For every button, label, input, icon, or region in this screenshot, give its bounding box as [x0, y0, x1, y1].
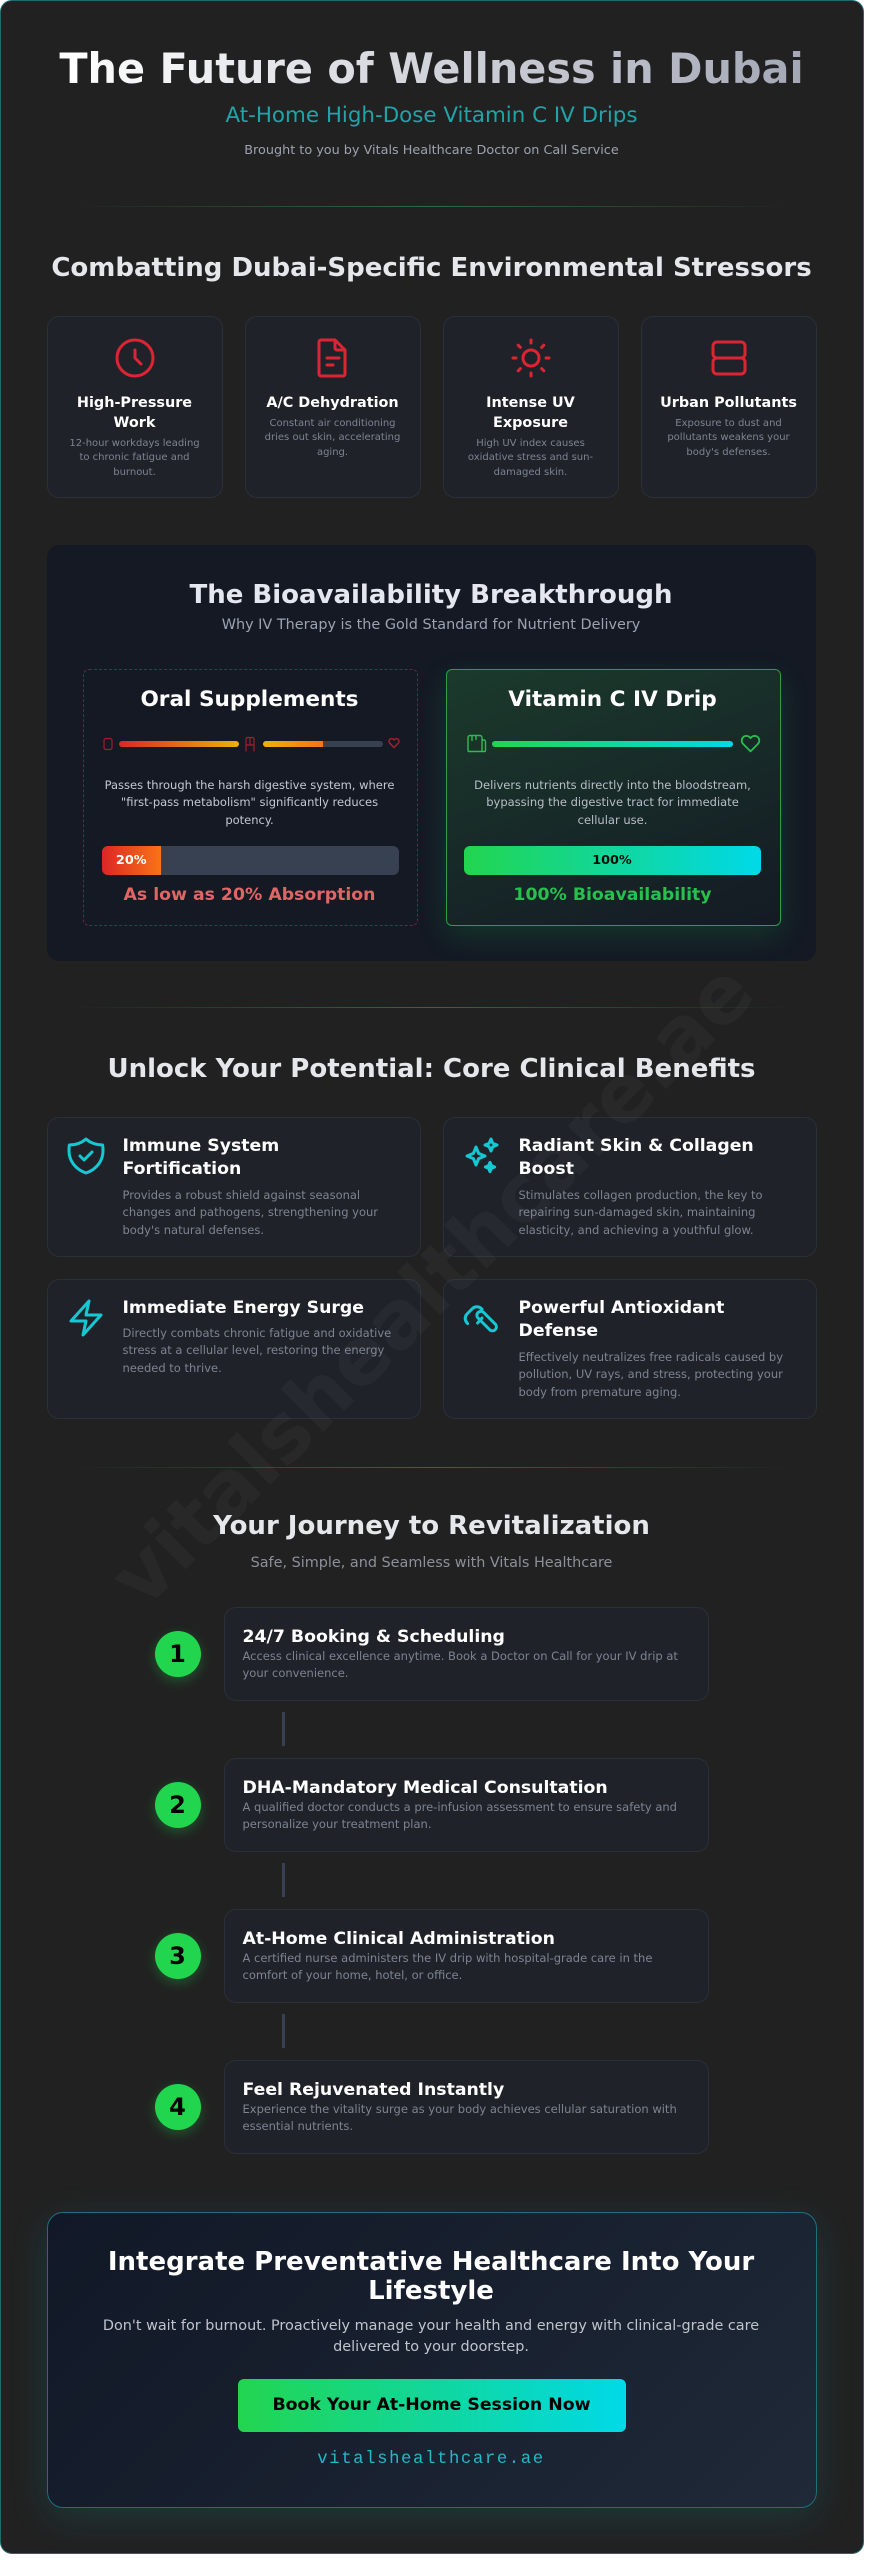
benefit description: elasticity, and achieving a youthful glow.	[518, 1223, 753, 1237]
benefit title: Fortification	[122, 1159, 241, 1179]
step description: your convenience.	[242, 1666, 348, 1680]
CTA button	[238, 2379, 626, 2432]
pathway diagram	[103, 736, 400, 752]
heading: journey: Your Journey to Revitalization	[213, 1511, 650, 1541]
icon: pill	[103, 738, 113, 750]
bar fill: 20%	[102, 846, 161, 875]
benefit title: Immune System	[122, 1136, 279, 1156]
icon: clock	[116, 338, 154, 378]
card description: burnout.	[113, 467, 156, 478]
icon: stacked boxes	[712, 340, 746, 376]
subtitle: At-Home High-Dose Vitamin C IV Drips	[225, 103, 638, 128]
card text: High-Pressure	[77, 395, 192, 411]
benefit description	[518, 1350, 783, 1399]
benefit description: Provides a robust shield against seasonal	[122, 1188, 360, 1202]
benefit description: Stimulates collagen production, the key to	[518, 1188, 763, 1202]
card title: Urban Pollutants	[660, 395, 797, 411]
step number: 3	[169, 1942, 186, 1970]
benefit description: body's natural defenses.	[122, 1223, 264, 1237]
card description: dries out skin, accelerating	[265, 432, 400, 443]
benefit description: stress at a cellular level, restoring the energy	[122, 1343, 384, 1357]
step description: A qualified doctor conducts a pre-infusion assessment to ensure safety and	[242, 1800, 677, 1814]
step number: 2	[169, 1791, 186, 1819]
CTA paragraph: Don't wait for burnout. Proactively manage your health and energy with clinical-grade care	[103, 2318, 759, 2334]
connector	[282, 1712, 284, 1746]
step card	[224, 1909, 708, 2003]
description: "first-pass metabolism" significantly reduces	[121, 795, 378, 809]
step description	[242, 1649, 678, 1680]
benefit title	[518, 1136, 754, 1179]
card title: Exposure	[493, 415, 568, 431]
connector	[282, 1863, 284, 1897]
card text	[77, 395, 192, 431]
step description	[242, 1951, 652, 1982]
pathway diagram	[467, 734, 760, 752]
step title: At-Home Clinical Administration	[242, 1929, 555, 1949]
title: The Future of Wellness in Dubai	[59, 45, 804, 93]
step number	[154, 1782, 200, 1828]
website link: vitalshealthcare.ae	[317, 2450, 545, 2469]
panel: immune system	[46, 1117, 420, 1257]
description: bypassing the digestive tract for immediate	[486, 795, 739, 809]
CTA heading	[48, 2248, 814, 2306]
attribution: Brought to you by Vitals Healthcare Doctor on Call Service	[244, 143, 619, 158]
subheading: Why IV Therapy is the Gold Standard for Nutrient Delivery	[222, 617, 640, 633]
benefit description: needed to thrive.	[122, 1361, 222, 1375]
absorption bar: 100%: 100%	[592, 853, 632, 868]
description	[474, 778, 751, 827]
bar: to stomach	[118, 741, 238, 747]
benefit title: Immediate Energy Surge	[122, 1298, 364, 1318]
CTA paragraph: delivered to your doorstep.	[333, 2338, 529, 2354]
card description: to chronic fatigue and	[79, 452, 190, 463]
step description: Experience the vitality surge as your body achieves cellular saturation with	[242, 2102, 677, 2116]
step title: 24/7 Booking & Scheduling	[242, 1627, 505, 1647]
CTA heading: Integrate Preventative Healthcare Into Your	[108, 2247, 754, 2277]
benefit title: Defense	[518, 1321, 598, 1341]
step 1	[150, 1607, 709, 1701]
absorption label: As low as 20% Absorption	[124, 885, 375, 905]
card description: Constant air conditioning	[269, 418, 396, 429]
bar: direct to bloodstream	[492, 741, 732, 747]
benefit description	[122, 1188, 378, 1237]
icon: lightning bolt	[69, 1300, 103, 1336]
benefit title	[518, 1298, 724, 1341]
step description: essential nutrients.	[242, 2119, 353, 2133]
absorption bar	[102, 846, 398, 875]
step number	[154, 2084, 200, 2130]
heading: clinical benefits: Unlock Your Potential: Core Clinical Benefits	[107, 1054, 756, 1084]
description	[105, 778, 394, 827]
absorption label: 100% Bioavailability	[513, 885, 712, 905]
benefit description: body from premature aging.	[518, 1385, 681, 1399]
panel: radiant skin	[442, 1117, 816, 1257]
step 2	[150, 1758, 709, 1852]
card title	[486, 395, 575, 431]
card description: High UV index causes	[476, 438, 585, 449]
panel: A/C dehydration	[244, 316, 420, 498]
description: cellular use.	[578, 813, 647, 827]
panel: antioxidant defense	[442, 1279, 816, 1419]
icon: capsule	[464, 1305, 498, 1332]
step description	[242, 2102, 677, 2133]
card description: aging.	[317, 447, 348, 458]
card text: Work	[114, 415, 155, 431]
panel: high-pressure work	[46, 316, 222, 498]
benefit description	[518, 1188, 763, 1237]
card description	[265, 418, 400, 458]
benefit title	[122, 1136, 279, 1179]
card description: oxidative stress and sun-	[468, 452, 593, 463]
benefit description: repairing sun-damaged skin, maintaining	[518, 1205, 755, 1219]
card description: Exposure to dust and	[675, 418, 782, 429]
step description: personalize your treatment plan.	[242, 1817, 431, 1831]
icon: shield	[68, 1138, 104, 1174]
icon: stomach	[245, 736, 255, 752]
benefit title: Radiant Skin & Collagen	[518, 1136, 754, 1156]
step description: A certified nurse administers the IV drip with hospital-grade care in the	[242, 1951, 652, 1965]
heading: The Bioavailability Breakthrough	[189, 580, 673, 610]
CTA heading: Lifestyle	[368, 2276, 494, 2306]
CTA button: Book Your At-Home Session Now	[272, 2395, 591, 2415]
panel: urban pollutants	[640, 316, 816, 498]
step number	[154, 1933, 200, 1979]
benefit description: changes and pathogens, strengthening your	[122, 1205, 378, 1219]
icon: sparkles	[466, 1138, 498, 1174]
watermark: vitalshealthcare.ae	[91, 945, 771, 1625]
description: Delivers nutrients directly into the bloodstream,	[474, 778, 751, 792]
CTA paragraph	[48, 2316, 814, 2357]
step card	[224, 1758, 708, 1852]
step number: 1	[169, 1640, 186, 1668]
benefit description: Directly combats chronic fatigue and oxidative	[122, 1326, 391, 1340]
bar fill: 20%: 20%	[116, 853, 147, 868]
card title: Intense UV	[486, 395, 575, 411]
step description	[242, 1800, 677, 1831]
step card	[224, 2060, 708, 2154]
icon: sun	[512, 338, 550, 378]
header	[59, 45, 804, 158]
card title: Oral Supplements	[140, 687, 359, 712]
step 3	[150, 1909, 709, 2003]
description: Passes through the harsh digestive system, where	[105, 778, 394, 792]
panel: call to action	[46, 2212, 816, 2508]
card description	[69, 438, 200, 478]
panel: vitamin C IV drip	[446, 669, 780, 926]
card description: damaged skin.	[494, 467, 567, 478]
description: potency.	[225, 813, 274, 827]
panel: energy surge	[46, 1279, 420, 1419]
panel: oral supplements	[82, 669, 418, 926]
journey subheading: Safe, Simple, and Seamless with Vitals Healthcare	[251, 1555, 612, 1571]
benefit description: pollution, UV rays, and stress, protecting your	[518, 1367, 783, 1381]
step title: Feel Rejuvenated Instantly	[242, 2080, 504, 2100]
bar: to bloodstream	[262, 741, 382, 747]
step description: Access clinical excellence anytime. Book a Doctor on Call for your IV drip at	[242, 1649, 678, 1663]
card description: 12-hour workdays leading	[69, 438, 200, 449]
step description: comfort of your home, hotel, or office.	[242, 1968, 462, 1982]
benefit title: Powerful Antioxidant	[518, 1298, 724, 1318]
card description: pollutants weakens your	[667, 432, 790, 443]
step card	[224, 1607, 708, 1701]
card description	[468, 438, 593, 478]
connector	[282, 2014, 284, 2048]
card title: A/C Dehydration	[266, 395, 399, 411]
step 4	[150, 2060, 709, 2154]
absorption bar: 100%	[464, 846, 760, 875]
panel: bioavailability breakthrough	[46, 545, 816, 961]
step number: 4	[169, 2093, 186, 2121]
step title: DHA-Mandatory Medical Consultation	[242, 1778, 608, 1798]
icon: heart	[388, 738, 400, 748]
icon: heart	[740, 735, 760, 752]
heading: environmental stressors: Combatting Dubai-Specific Environmental Stressors	[51, 253, 812, 283]
benefit description: Effectively neutralizes free radicals caused by	[518, 1350, 783, 1364]
panel: UV exposure	[442, 316, 618, 498]
icon: document	[318, 338, 346, 378]
step number	[154, 1631, 200, 1677]
benefit description	[122, 1326, 391, 1375]
card title: Vitamin C IV Drip	[508, 687, 717, 712]
card description: body's defenses.	[686, 447, 771, 458]
benefit title: Boost	[518, 1159, 574, 1179]
icon: IV bag	[467, 734, 486, 752]
card description	[667, 418, 790, 458]
